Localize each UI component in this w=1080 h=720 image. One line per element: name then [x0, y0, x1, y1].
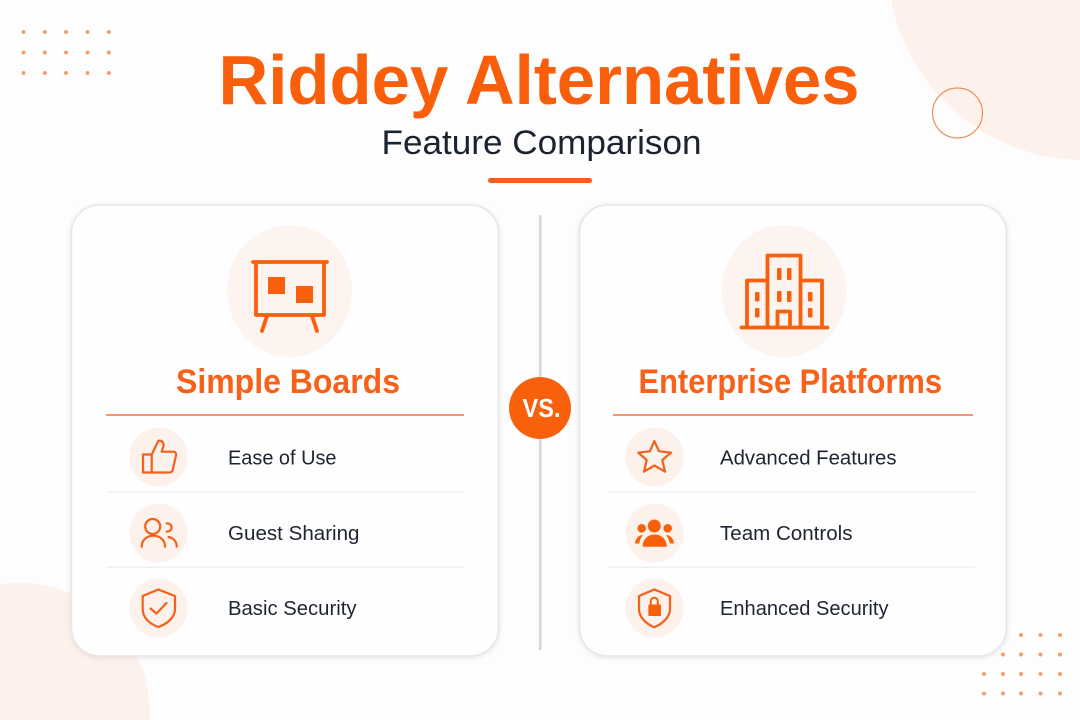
row divider — [106, 492, 464, 493]
row divider — [106, 566, 464, 568]
row: team controls: Team Controls — [720, 523, 852, 545]
vs badge: VS. — [522, 393, 560, 423]
row: enhanced security — [626, 578, 888, 638]
dot grid: bottom right — [982, 633, 1062, 696]
dot grid: top left — [22, 30, 111, 75]
title: Riddey Alternatives — [218, 41, 860, 119]
panel: simple boards — [72, 205, 498, 656]
row: guest sharing: Guest Sharing — [228, 523, 360, 545]
heading rule — [613, 414, 973, 416]
center divider — [539, 215, 542, 650]
row: team controls — [626, 504, 852, 562]
row: guest sharing — [130, 504, 360, 562]
decorative circle: top right — [891, 0, 1080, 160]
row: ease of use — [130, 428, 336, 486]
subtitle: Feature Comparison — [382, 124, 702, 162]
heading rule — [106, 414, 464, 416]
row: advanced features: Advanced Features — [720, 448, 896, 470]
row: basic security: Basic Security — [228, 598, 356, 620]
panel: enterprise platforms — [580, 205, 1006, 656]
icon: office buildings — [722, 225, 846, 357]
row divider — [607, 492, 975, 493]
decorative ring: top right — [932, 88, 982, 138]
row: enhanced security: Enhanced Security — [720, 598, 888, 620]
vs badge — [509, 377, 571, 439]
icon: presentation board — [227, 225, 352, 357]
row: advanced features — [626, 428, 896, 486]
heading: enterprise platforms: Enterprise Platforms — [638, 363, 942, 401]
decorative circle: bottom left — [0, 583, 150, 720]
row: ease of use: Ease of Use — [228, 448, 336, 470]
row: basic security — [130, 578, 356, 638]
row divider — [607, 566, 975, 568]
heading: simple boards: Simple Boards — [176, 363, 400, 401]
title underline — [488, 178, 592, 183]
